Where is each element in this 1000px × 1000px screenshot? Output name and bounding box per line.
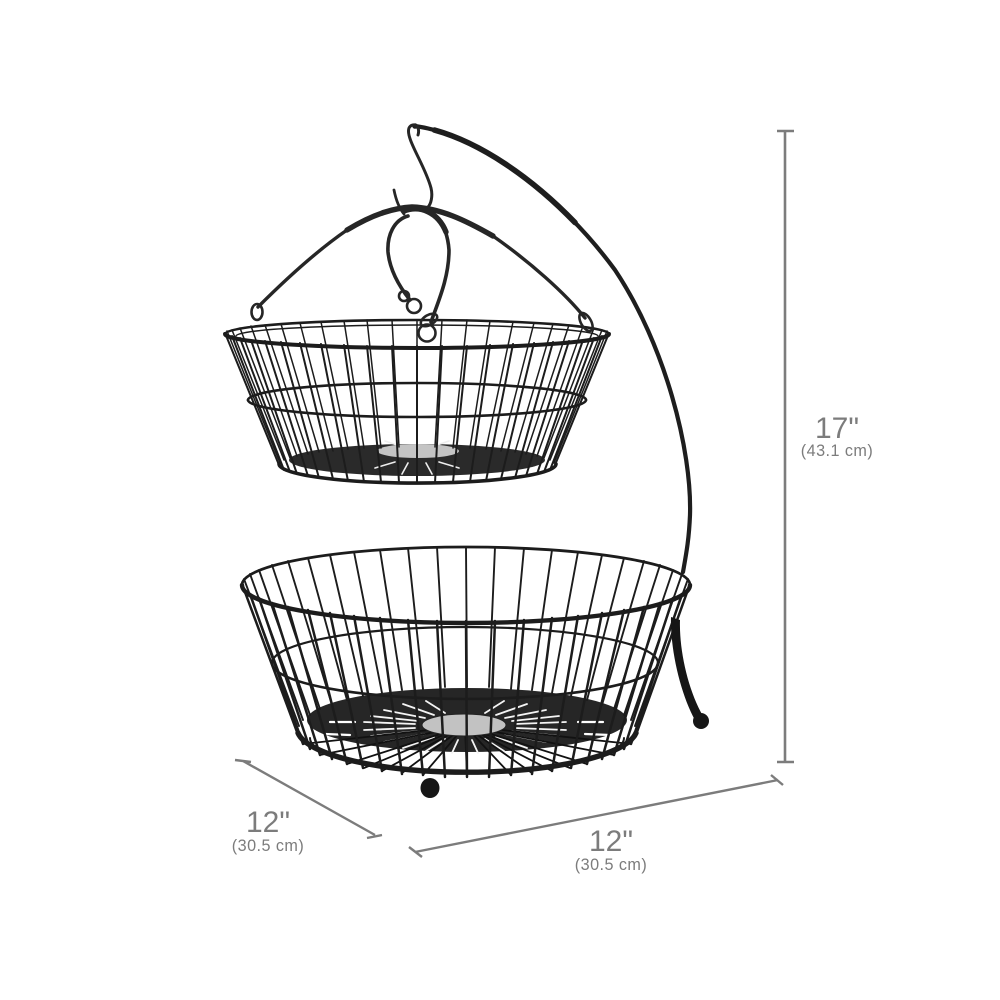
depth label: 12" xyxy=(246,806,290,839)
right leg xyxy=(671,617,703,720)
dimension: width xyxy=(409,775,783,874)
lower basket front rim xyxy=(242,585,690,623)
hook xyxy=(408,125,432,207)
radial spokes xyxy=(364,701,566,753)
depth metric label: (30.5 cm) xyxy=(232,837,304,855)
width metric label: (30.5 cm) xyxy=(575,856,647,874)
upper basket front rim and rings xyxy=(225,334,609,348)
lower basket back wires xyxy=(244,547,688,726)
right ball foot xyxy=(693,713,709,729)
depth line xyxy=(235,760,382,838)
height metric label: (43.1 cm) xyxy=(801,442,873,460)
upper basket back rim and ring xyxy=(225,320,609,400)
upper basket base disc xyxy=(289,438,545,476)
width label: 12" xyxy=(589,825,633,858)
front ball foot xyxy=(420,778,440,798)
handle thin arms xyxy=(258,230,585,318)
lower basket front wires xyxy=(242,584,690,777)
lower basket base disc xyxy=(303,688,631,777)
chain rings xyxy=(399,291,439,342)
stand legs and ball feet xyxy=(420,617,709,798)
dimension: height xyxy=(777,131,873,762)
dimension: depth xyxy=(232,760,382,855)
height line xyxy=(777,131,794,762)
lower basket base ring xyxy=(298,733,636,772)
width line xyxy=(409,775,783,857)
height label: 17" xyxy=(815,412,859,445)
base center plate xyxy=(422,714,506,736)
upper basket front wires xyxy=(225,333,609,483)
handle grip xyxy=(347,207,493,236)
hanging handle, hook and rings xyxy=(252,125,595,342)
stand arm xyxy=(415,126,690,572)
upper basket xyxy=(225,320,609,483)
lower basket xyxy=(242,547,690,777)
side links xyxy=(252,304,595,333)
lower basket back rim and ring xyxy=(242,547,690,585)
upper basket back wires xyxy=(227,320,607,463)
center loop xyxy=(388,207,449,322)
lower basket middle ring xyxy=(272,663,658,699)
